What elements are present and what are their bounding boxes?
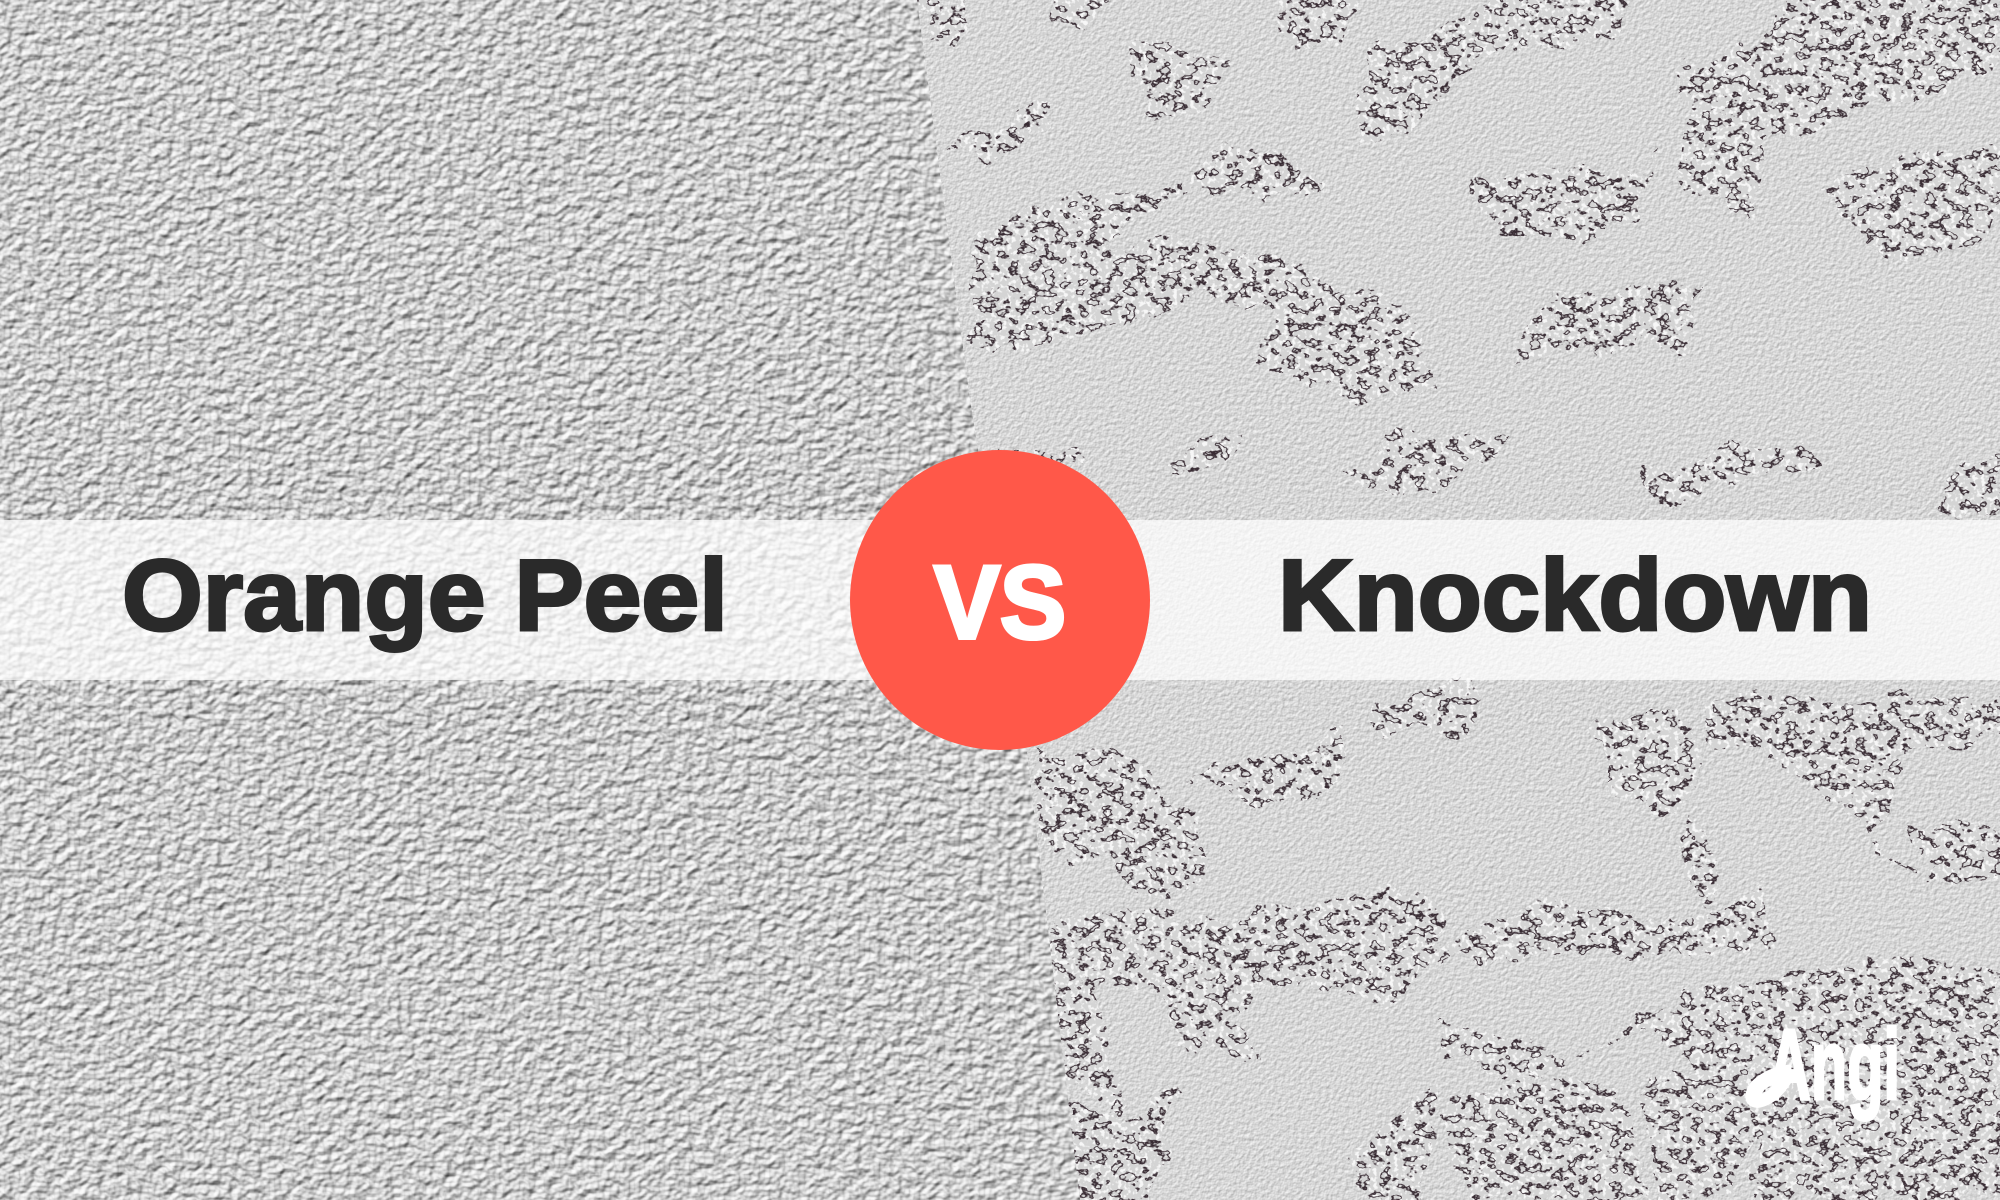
logo: Angi xyxy=(1747,1009,1900,1121)
vs badge xyxy=(850,450,1150,750)
label band xyxy=(0,520,2000,680)
panel: orange peel texture xyxy=(0,0,1100,1200)
logo: Angi: Angi xyxy=(1768,1009,1900,1121)
vs badge: VS xyxy=(934,545,1066,661)
heading: knockdown: Knockdown xyxy=(1278,540,1872,652)
heading: orange peel: Orange Peel xyxy=(122,540,728,652)
rough recessed plaster areas xyxy=(921,0,2000,1200)
